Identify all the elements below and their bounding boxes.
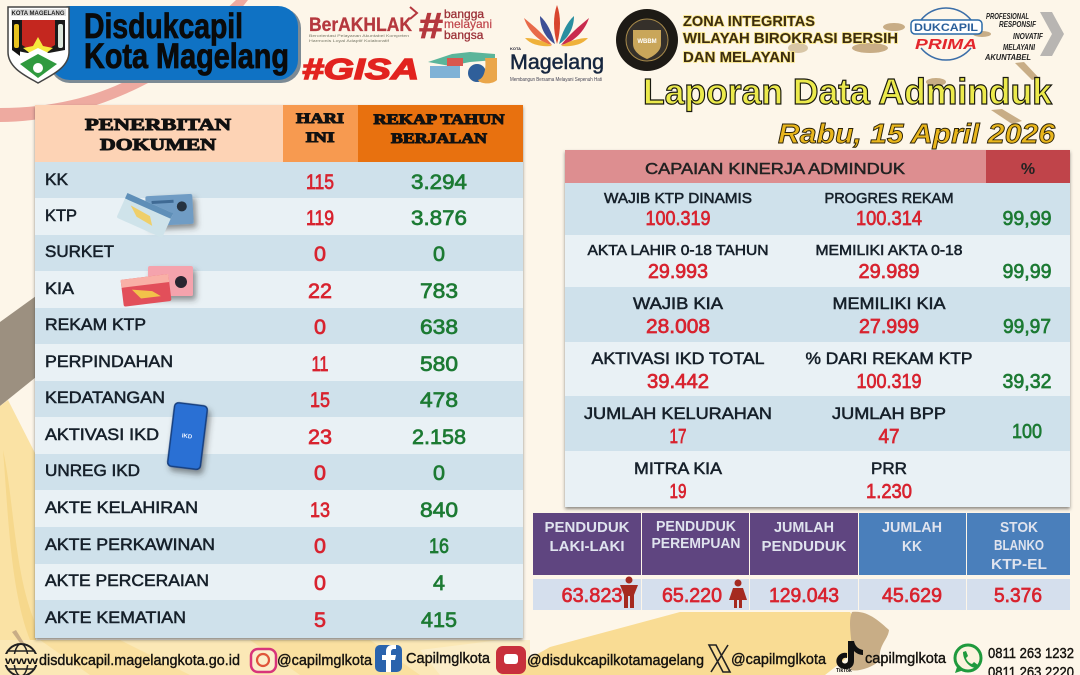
row: wajib KIA [565,287,1070,342]
row: aktivasi IKD: 39.442 [647,371,709,393]
row: REKAM KTP: REKAM KTP [45,315,146,334]
card: penduduk perempuan [642,513,749,610]
card: jumlah KK: KK [902,538,922,555]
logo: Magelang wordmark [510,46,604,83]
row: UNREG IKD: UNREG IKD [45,461,140,480]
footer: website: disdukcapil.magelangkota.go.id [39,652,240,669]
row: KTP dinamis: WAJIB KTP DINAMIS [604,190,752,207]
card: penduduk laki-laki: PENDUDUK [544,519,630,536]
row: KEDATANGAN: 478 [420,389,458,412]
row: KEDATANGAN [35,381,523,417]
card: penduduk perempuan: PENDUDUK [656,518,736,535]
row: wajib KIA: 28.008 [646,316,710,338]
logo: Dukcapil Prima: DUKCAPIL [914,22,978,34]
row: akta lahir: MEMILIKI AKTA 0-18 [816,242,962,259]
row: AKTE PERCERAIAN: 0 [314,572,326,595]
footer: tiktok: capilmglkota [865,650,947,667]
logo: BerAKHLAK bangga melayani bangsa: # [419,5,443,46]
icon: dotted chevron [1040,12,1064,56]
row: PERPINDAHAN: PERPINDAHAN [45,352,173,371]
card: stok blanko: BLANKO [994,537,1044,554]
row: AKTE KELAHIRAN: 840 [420,499,458,522]
footer: youtube: @disdukcapilkotamagelang [527,652,704,669]
icon: WBBM badge: WBBM [637,39,657,45]
row: SURKET [35,235,523,271]
row: aktivasi IKD: 39,32 [1002,371,1052,393]
logo: anniversary 1120 [428,52,497,83]
footer: tiktok: TikTok [836,668,852,674]
title: Laporan Data Adminduk [643,71,1053,112]
row: KTP dinamis: PROGRES REKAM [824,190,954,207]
logo: BerAKHLAK bangga melayani bangsa: bangsa [444,28,484,42]
row: aktivasi IKD: 100.319 [856,371,922,393]
text: Zona Integritas: WILAYAH BIROKRASI BERSIH [683,30,898,47]
row: UNREG IKD: 0 [314,462,326,485]
header banner: Disdukcapil Kota Magelang: Kota Magelang [84,37,289,76]
logo: Magelang flower [524,5,589,46]
table header: REKAP TAHUN [374,112,505,128]
logo: BerAKHLAK bangga melayani bangsa: BerAKHLAK [309,15,412,36]
row: kelurahan [565,396,1070,451]
logo: BerAKHLAK bangga melayani bangsa: Berorientasi Pelayanan Akuntabel Kompeten [309,33,409,38]
header banner: Disdukcapil Kota Magelang: Disdukcapil [84,7,243,46]
text: Zona Integritas [683,13,898,66]
row: akta lahir: AKTA LAHIR 0-18 TAHUN [588,242,768,259]
row: wajib KIA: MEMILIKI KIA [832,294,946,313]
row: AKTIVASI IKD: AKTIVASI IKD [45,425,159,444]
footer: X [709,645,827,672]
row: AKTE PERCERAIAN: 4 [433,572,445,595]
header banner: Disdukcapil Kota Magelang [50,6,301,83]
footer: youtube [496,646,704,674]
table header: HARI [296,111,344,127]
card: jumlah KK [859,513,966,610]
row: kelurahan: JUMLAH BPP [832,404,946,423]
card: jumlah penduduk [750,513,858,610]
logo: #GISA: #GISA [302,54,419,86]
row: AKTE KEMATIAN: 5 [314,609,326,632]
text: Prima values: MELAYANI [1003,43,1036,52]
row: AKTE PERKAWINAN: 0 [314,535,326,558]
row: AKTIVASI IKD: 23 [308,426,332,449]
card: stok blanko: STOK [1000,519,1038,536]
row: KIA [35,271,523,308]
table header: % [1021,161,1035,178]
row: KIA: 22 [308,280,332,303]
row: KK: 3.294 [411,171,467,194]
row: AKTE KELAHIRAN [35,490,523,527]
row: akta lahir: 99,99 [1002,261,1052,283]
row: mitra KIA: PRR [871,459,907,478]
icon: man [620,576,638,608]
logo: Magelang wordmark: Magelang [510,51,604,74]
row: AKTE PERKAWINAN: AKTE PERKAWINAN [45,535,215,554]
row: KK: KK [45,170,69,189]
row: AKTIVASI IKD [35,417,523,454]
row: mitra KIA: 19 [670,481,686,503]
row: wajib KIA: 27.999 [859,316,919,338]
row: wajib KIA: 99,97 [1003,316,1051,338]
table header: CAPAIAN KINERJA ADMINDUK [645,161,905,178]
row: akta lahir: 29.993 [648,261,708,283]
card: penduduk perempuan: PEREMPUAN [652,535,740,552]
logo: BerAKHLAK bangga melayani bangsa: melayani [444,17,492,31]
row: KTP: KTP [45,206,77,225]
row: PERPINDAHAN: 11 [312,353,328,376]
icon: Kota Magelang shield: KOTA MAGELANG [12,11,65,17]
row: KTP dinamis: 100.314 [856,208,922,230]
text: Zona Integritas: ZONA INTEGRITAS [683,13,815,30]
logo: Dukcapil Prima [911,8,982,60]
row: PERPINDAHAN [35,344,523,381]
card: jumlah KK: 45.629 [882,585,942,607]
row: AKTE PERKAWINAN [35,527,523,564]
row: wajib KIA: WAJIB KIA [633,294,724,313]
card: jumlah penduduk: 129.043 [769,585,839,607]
card: penduduk perempuan: 65.220 [662,585,722,607]
card: jumlah KK: JUMLAH [882,519,942,536]
table header [35,105,523,162]
row: mitra KIA [565,451,1070,507]
row: kelurahan: JUMLAH KELURAHAN [584,404,772,423]
footer: facebook [375,645,491,672]
row: AKTIVASI IKD: 2.158 [412,426,466,449]
row: mitra KIA: 1.230 [866,481,912,503]
logo: Magelang wordmark: Membangun Bersama Melayani Sepenuh Hati [510,77,602,83]
row: AKTE KEMATIAN: 415 [421,609,457,632]
row: KEDATANGAN: KEDATANGAN [45,388,165,407]
text: Prima values [984,12,1044,62]
row: KTP: 3.876 [411,207,467,230]
card: penduduk laki-laki: 63.823 [562,585,622,607]
footer: facebook: Capilmglkota [406,650,491,667]
row: SURKET: 0 [314,243,326,266]
row: KTP dinamis: 100.319 [646,208,710,230]
text: Zona Integritas: DAN MELAYANI [683,49,795,66]
text: Prima values: RESPONSIF [999,20,1037,29]
icon: Kota Magelang shield [8,7,69,83]
icon: woman [729,580,747,608]
row: UNREG IKD [35,454,523,490]
row: KIA: KIA [45,279,75,298]
row: AKTE KEMATIAN [35,600,523,638]
panel: population summary [533,513,1070,610]
row: REKAM KTP [35,308,523,344]
row: aktivasi IKD [565,342,1070,396]
card: jumlah penduduk: PENDUDUK [762,538,847,555]
row: AKTE KEMATIAN: AKTE KEMATIAN [45,608,186,627]
text: Prima values: INOVATIF [1013,32,1044,41]
logo: BerAKHLAK bangga melayani bangsa: bangga [444,7,484,21]
footer: website: www [4,656,38,667]
row: KEDATANGAN: 15 [310,389,330,412]
row: AKTE PERCERAIAN [35,564,523,600]
table header: PENERBITAN [85,115,232,134]
row: akta lahir [565,235,1070,287]
panel: penerbitan dokumen table [35,105,523,638]
icon: WBBM badge [616,9,678,71]
logo: Dukcapil Prima: PRIMA [915,36,977,53]
row: kelurahan: 100 [1012,421,1042,443]
table header: INI [306,130,335,146]
row: mitra KIA: MITRA KIA [634,459,723,478]
date: Rabu, 15 April 2026 [778,118,1055,149]
footer: tiktok [836,641,947,674]
footer: instagram [251,649,373,672]
row: KK [35,162,523,198]
row: kelurahan: 17 [670,426,686,448]
card: stok blanko [967,513,1070,610]
row: REKAM KTP: 0 [314,316,326,339]
card: jumlah penduduk: JUMLAH [774,519,834,536]
icon: IKD phone: IKD [181,433,193,441]
card: stok blanko: KTP-EL [991,556,1047,573]
row: aktivasi IKD: % DARI REKAM KTP [806,349,972,368]
table header: BERJALAN [391,131,487,147]
row: SURKET: 0 [433,243,445,266]
card: penduduk laki-laki: LAKI-LAKI [550,538,624,555]
row: AKTE KELAHIRAN: AKTE KELAHIRAN [45,498,198,517]
icon: KIA cards [121,266,193,307]
row: SURKET: SURKET [45,242,114,261]
card: penduduk laki-laki [533,513,641,610]
row: UNREG IKD: 0 [433,462,445,485]
footer: website [4,644,240,675]
row: PERPINDAHAN: 580 [420,353,458,376]
row: KTP dinamis [565,183,1070,235]
card: stok blanko: 5.376 [994,585,1042,607]
row: KK: 115 [306,171,334,194]
text: Prima values: PROFESIONAL [986,12,1029,21]
table header [565,150,1070,183]
row: AKTE PERCERAIAN: AKTE PERCERAIAN [45,571,209,590]
row: AKTE PERKAWINAN: 16 [429,535,449,558]
logo: BerAKHLAK bangga melayani bangsa: Harmonis Loyal Adaptif Kolaboratif [309,38,390,43]
row: kelurahan: 47 [878,426,900,448]
row: KIA: 783 [420,280,458,303]
row: KTP: 119 [306,207,334,230]
footer: whatsapp [955,645,1074,675]
row: aktivasi IKD: AKTIVASI IKD TOTAL [592,349,764,368]
panel: capaian kinerja adminduk [565,150,1070,507]
row: REKAM KTP: 638 [420,316,458,339]
text: Prima values: AKUNTABEL [984,53,1031,62]
row: KTP dinamis: 99,99 [1002,208,1052,230]
row: KTP [35,198,523,235]
icon: KTP cards [116,193,194,238]
logo: Magelang wordmark: KOTA [510,46,521,51]
icon: IKD phone [167,402,208,470]
footer: instagram: @capilmglkota [277,652,373,669]
table header: DOKUMEN [100,135,217,154]
row: AKTE KELAHIRAN: 13 [310,499,330,522]
row: akta lahir: 29.989 [858,261,920,283]
footer: X: @capilmglkota [731,651,827,668]
logo: BerAKHLAK bangga melayani bangsa [309,5,492,46]
